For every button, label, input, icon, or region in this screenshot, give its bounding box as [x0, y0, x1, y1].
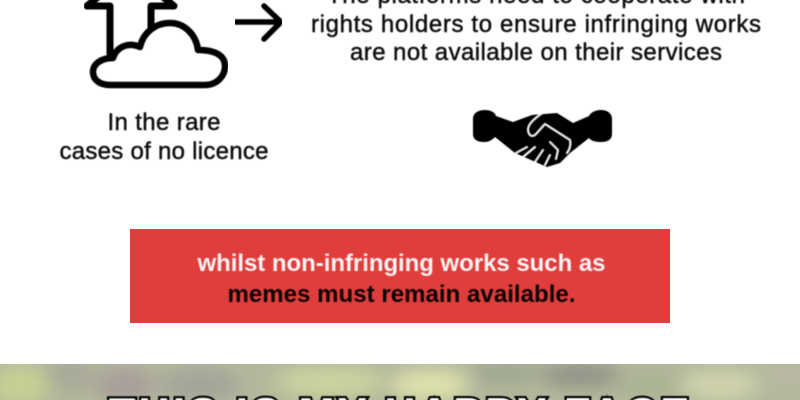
callout text: memes must remain available.: [228, 281, 576, 308]
text: in the rare cases: [60, 109, 268, 165]
panel: red callout: [130, 229, 670, 323]
text: platforms need to cooperate: rights holders to ensure infringing works: [311, 11, 761, 38]
panel: blurred meme photo with caption: [0, 360, 800, 400]
icon: cloud with upload arrows: [87, 0, 225, 85]
text: platforms need to cooperate: are not available on their services: [350, 39, 722, 66]
callout text: whilst non-infringing works such as: [196, 250, 606, 277]
icon: handshake: [473, 110, 612, 167]
callout text: [196, 250, 606, 308]
text: in the rare cases: In the rare: [108, 109, 220, 136]
text: platforms need to cooperate: [311, 0, 761, 66]
arrow: right: [236, 6, 281, 39]
text: in the rare cases: cases of no licence: [60, 138, 268, 165]
